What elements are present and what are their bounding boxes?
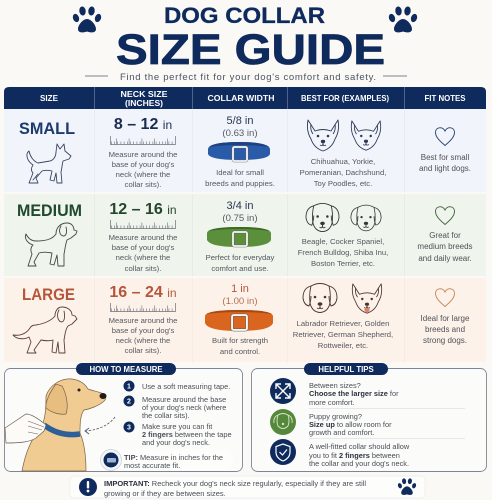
collar width medium bbox=[222, 200, 258, 224]
small heading: SMALL bbox=[19, 119, 75, 138]
large heading: LARGE bbox=[22, 285, 75, 304]
table header: COLLAR WIDTH bbox=[208, 93, 274, 103]
collar width large: 1 in bbox=[231, 283, 249, 295]
tip: puppy growing bbox=[270, 409, 392, 437]
icon: small dog bbox=[27, 144, 71, 183]
fit note small bbox=[419, 153, 471, 173]
tip: well fitted collar: the collar and your dog's neck. bbox=[309, 459, 409, 468]
panel: large row bbox=[4, 278, 486, 362]
ruler small bbox=[110, 136, 176, 144]
breeds large: Labrador Retriever, Golden bbox=[297, 319, 389, 328]
tip callout: TIP: Measure in inches for the bbox=[124, 453, 223, 462]
collar note small: breeds and puppies. bbox=[205, 179, 275, 188]
neck instructions medium: neck (where the bbox=[116, 253, 170, 262]
step 3: 2 fingers between the tape bbox=[142, 430, 232, 439]
step 2: Measure around the base bbox=[142, 395, 226, 404]
tip: between sizes: Choose the larger size for bbox=[309, 389, 399, 398]
fit note small: and light dogs. bbox=[419, 164, 471, 173]
collar note small: Ideal for small bbox=[216, 168, 264, 177]
neck size large: 16 – 24 in bbox=[109, 284, 177, 301]
tip callout: most accurate fit. bbox=[124, 461, 180, 470]
breeds large: Rottweiler, etc. bbox=[318, 341, 368, 350]
fit note small: Best for small bbox=[421, 153, 469, 162]
important text: growing or if they are between sizes. bbox=[104, 489, 226, 498]
icon: beagle bbox=[306, 203, 339, 232]
step 3: 3 bbox=[127, 424, 131, 432]
neck instructions medium: Measure around the bbox=[109, 233, 177, 242]
ruler medium bbox=[110, 220, 176, 228]
neck instructions medium: collar sits). bbox=[125, 264, 161, 273]
title: dog collar: DOG COLLAR bbox=[164, 3, 325, 28]
panel: helpful tips bbox=[252, 363, 486, 472]
tip: well fitted collar: A well-fitted collar should allow bbox=[309, 442, 410, 451]
table header: BEST FOR (EXAMPLES) bbox=[301, 93, 389, 103]
table header: (INCHES) bbox=[125, 98, 163, 108]
collar note large bbox=[212, 336, 268, 356]
icon: heart medium bbox=[436, 207, 454, 224]
title: size guide: SIZE GUIDE bbox=[116, 26, 385, 74]
icon: yorkie bbox=[351, 121, 381, 150]
collar width medium: (0.75 in) bbox=[222, 213, 258, 224]
fit note medium bbox=[417, 231, 473, 263]
collar width large bbox=[222, 283, 258, 307]
breeds small: Toy Poodles, etc. bbox=[314, 179, 372, 188]
breeds small bbox=[300, 157, 386, 188]
tip: well fitted collar bbox=[270, 439, 410, 468]
tip: puppy growing: growth and comfort. bbox=[309, 428, 374, 437]
step 3 bbox=[124, 422, 232, 447]
icon: spaniel bbox=[351, 205, 381, 231]
breeds small: Chihuahua, Yorkie, bbox=[311, 157, 375, 166]
icon: chihuahua bbox=[307, 120, 339, 151]
breeds medium: French Bulldog, Shiba Inu, bbox=[298, 248, 388, 257]
breeds large bbox=[293, 319, 393, 350]
arrow: dashed measure arrow bbox=[85, 417, 115, 434]
neck instructions large: neck (where the bbox=[116, 336, 170, 345]
breeds medium bbox=[298, 237, 388, 268]
icon: medium dog bbox=[25, 223, 77, 266]
neck instructions small bbox=[109, 150, 177, 189]
breeds medium: Boston Terrier, etc. bbox=[311, 259, 375, 268]
collar width small: 5/8 in bbox=[227, 115, 253, 127]
step 3: and your dog's neck. bbox=[142, 438, 210, 447]
fit note large: breeds and bbox=[425, 325, 465, 334]
step 2: the collar sits). bbox=[142, 411, 190, 420]
ruler large bbox=[110, 303, 176, 312]
fit note medium: medium breeds bbox=[417, 242, 473, 251]
important text bbox=[104, 479, 366, 498]
neck instructions large: Measure around the bbox=[109, 316, 177, 325]
neck instructions small: collar sits). bbox=[125, 180, 161, 189]
panel: small row bbox=[4, 109, 486, 192]
panel: how to measure bbox=[4, 363, 242, 472]
tip: well fitted collar: you to fit 2 fingers between bbox=[309, 451, 400, 460]
neck instructions large: collar sits). bbox=[125, 346, 161, 355]
table header: FIT NOTES bbox=[424, 93, 466, 103]
step 1: 1 bbox=[127, 384, 131, 390]
collar note medium: comfort and use. bbox=[211, 264, 269, 273]
collar note medium bbox=[206, 253, 275, 273]
fit note large: strong dogs. bbox=[423, 336, 467, 345]
neck instructions medium bbox=[109, 233, 177, 273]
neck size medium: 12 – 16 in bbox=[109, 201, 177, 218]
step 2: 2 bbox=[127, 398, 131, 406]
panel: medium row bbox=[4, 194, 486, 276]
medium heading: MEDIUM bbox=[17, 201, 82, 220]
tip: between sizes: more comfort. bbox=[309, 398, 355, 407]
collar width small: (0.63 in) bbox=[222, 128, 258, 139]
collar note large: and control. bbox=[220, 347, 260, 356]
fit note large bbox=[421, 314, 470, 345]
icon: heart small bbox=[436, 128, 454, 146]
collar note medium: Perfect for everyday bbox=[206, 253, 275, 262]
table header: NECK SIZE bbox=[120, 89, 168, 99]
icon: blue collar bbox=[208, 142, 270, 161]
how to measure heading: HOW TO MEASURE bbox=[89, 365, 163, 374]
neck instructions small: Measure around the bbox=[109, 150, 177, 159]
helpful tips heading bbox=[304, 363, 388, 375]
icon: german shepherd bbox=[352, 284, 382, 313]
step 1: Use a soft measuring tape. bbox=[142, 382, 230, 391]
icon: large dog bbox=[13, 307, 77, 353]
tip: between sizes: Between sizes? bbox=[309, 381, 361, 390]
icon: green collar bbox=[207, 227, 271, 247]
fit note medium: and daily wear. bbox=[418, 254, 472, 263]
callout: important bbox=[70, 476, 425, 498]
icon: small paw bbox=[397, 478, 417, 495]
important text: IMPORTANT: Recheck your dog's neck size regularly, especially if they are still bbox=[104, 479, 366, 488]
neck instructions medium: base of your dog's bbox=[112, 243, 174, 252]
icon: exclamation bbox=[79, 478, 97, 496]
subtitle: Find the perfect fit for your dog's comfort and safety. bbox=[120, 72, 376, 83]
breeds medium: Beagle, Cocker Spaniel, bbox=[302, 237, 384, 246]
tip: between sizes bbox=[270, 378, 399, 407]
neck instructions large: base of your dog's bbox=[112, 326, 174, 335]
tip callout bbox=[100, 449, 233, 470]
breeds small: Pomeranian, Dachshund, bbox=[300, 168, 386, 177]
step 2 bbox=[124, 395, 226, 420]
table header bbox=[4, 87, 486, 109]
neck size small: 8 – 12 in bbox=[114, 116, 172, 133]
collar note large: Built for strength bbox=[212, 336, 268, 345]
step 1 bbox=[124, 380, 230, 392]
step 2: of your dog's neck (where bbox=[142, 403, 226, 412]
table header: SIZE bbox=[40, 93, 58, 103]
helpful tips heading: HELPFUL TIPS bbox=[318, 365, 374, 374]
collar width small bbox=[222, 115, 258, 139]
fit note large: Ideal for large bbox=[421, 314, 470, 323]
collar width large: (1.00 in) bbox=[222, 296, 258, 307]
neck instructions small: base of your dog's bbox=[112, 160, 174, 169]
illustration: dog being measured bbox=[5, 379, 106, 471]
tip: puppy growing: Size up to allow room for bbox=[309, 420, 392, 429]
tip: puppy growing: Puppy growing? bbox=[309, 412, 362, 421]
breeds large: Retriever, German Shepherd, bbox=[293, 330, 393, 339]
how to measure heading bbox=[76, 363, 176, 375]
icon: labrador bbox=[303, 284, 337, 312]
collar width medium: 3/4 in bbox=[227, 200, 253, 212]
icon: right paw bbox=[388, 6, 418, 32]
fit note medium: Great for bbox=[429, 231, 461, 240]
icon: heart large bbox=[436, 289, 454, 306]
neck instructions large bbox=[109, 316, 177, 355]
icon: left paw bbox=[72, 6, 102, 32]
step 3: Make sure you can fit bbox=[142, 422, 212, 431]
collar note small bbox=[205, 168, 275, 188]
neck instructions small: neck (where the bbox=[116, 170, 170, 179]
icon: orange collar bbox=[205, 310, 273, 331]
